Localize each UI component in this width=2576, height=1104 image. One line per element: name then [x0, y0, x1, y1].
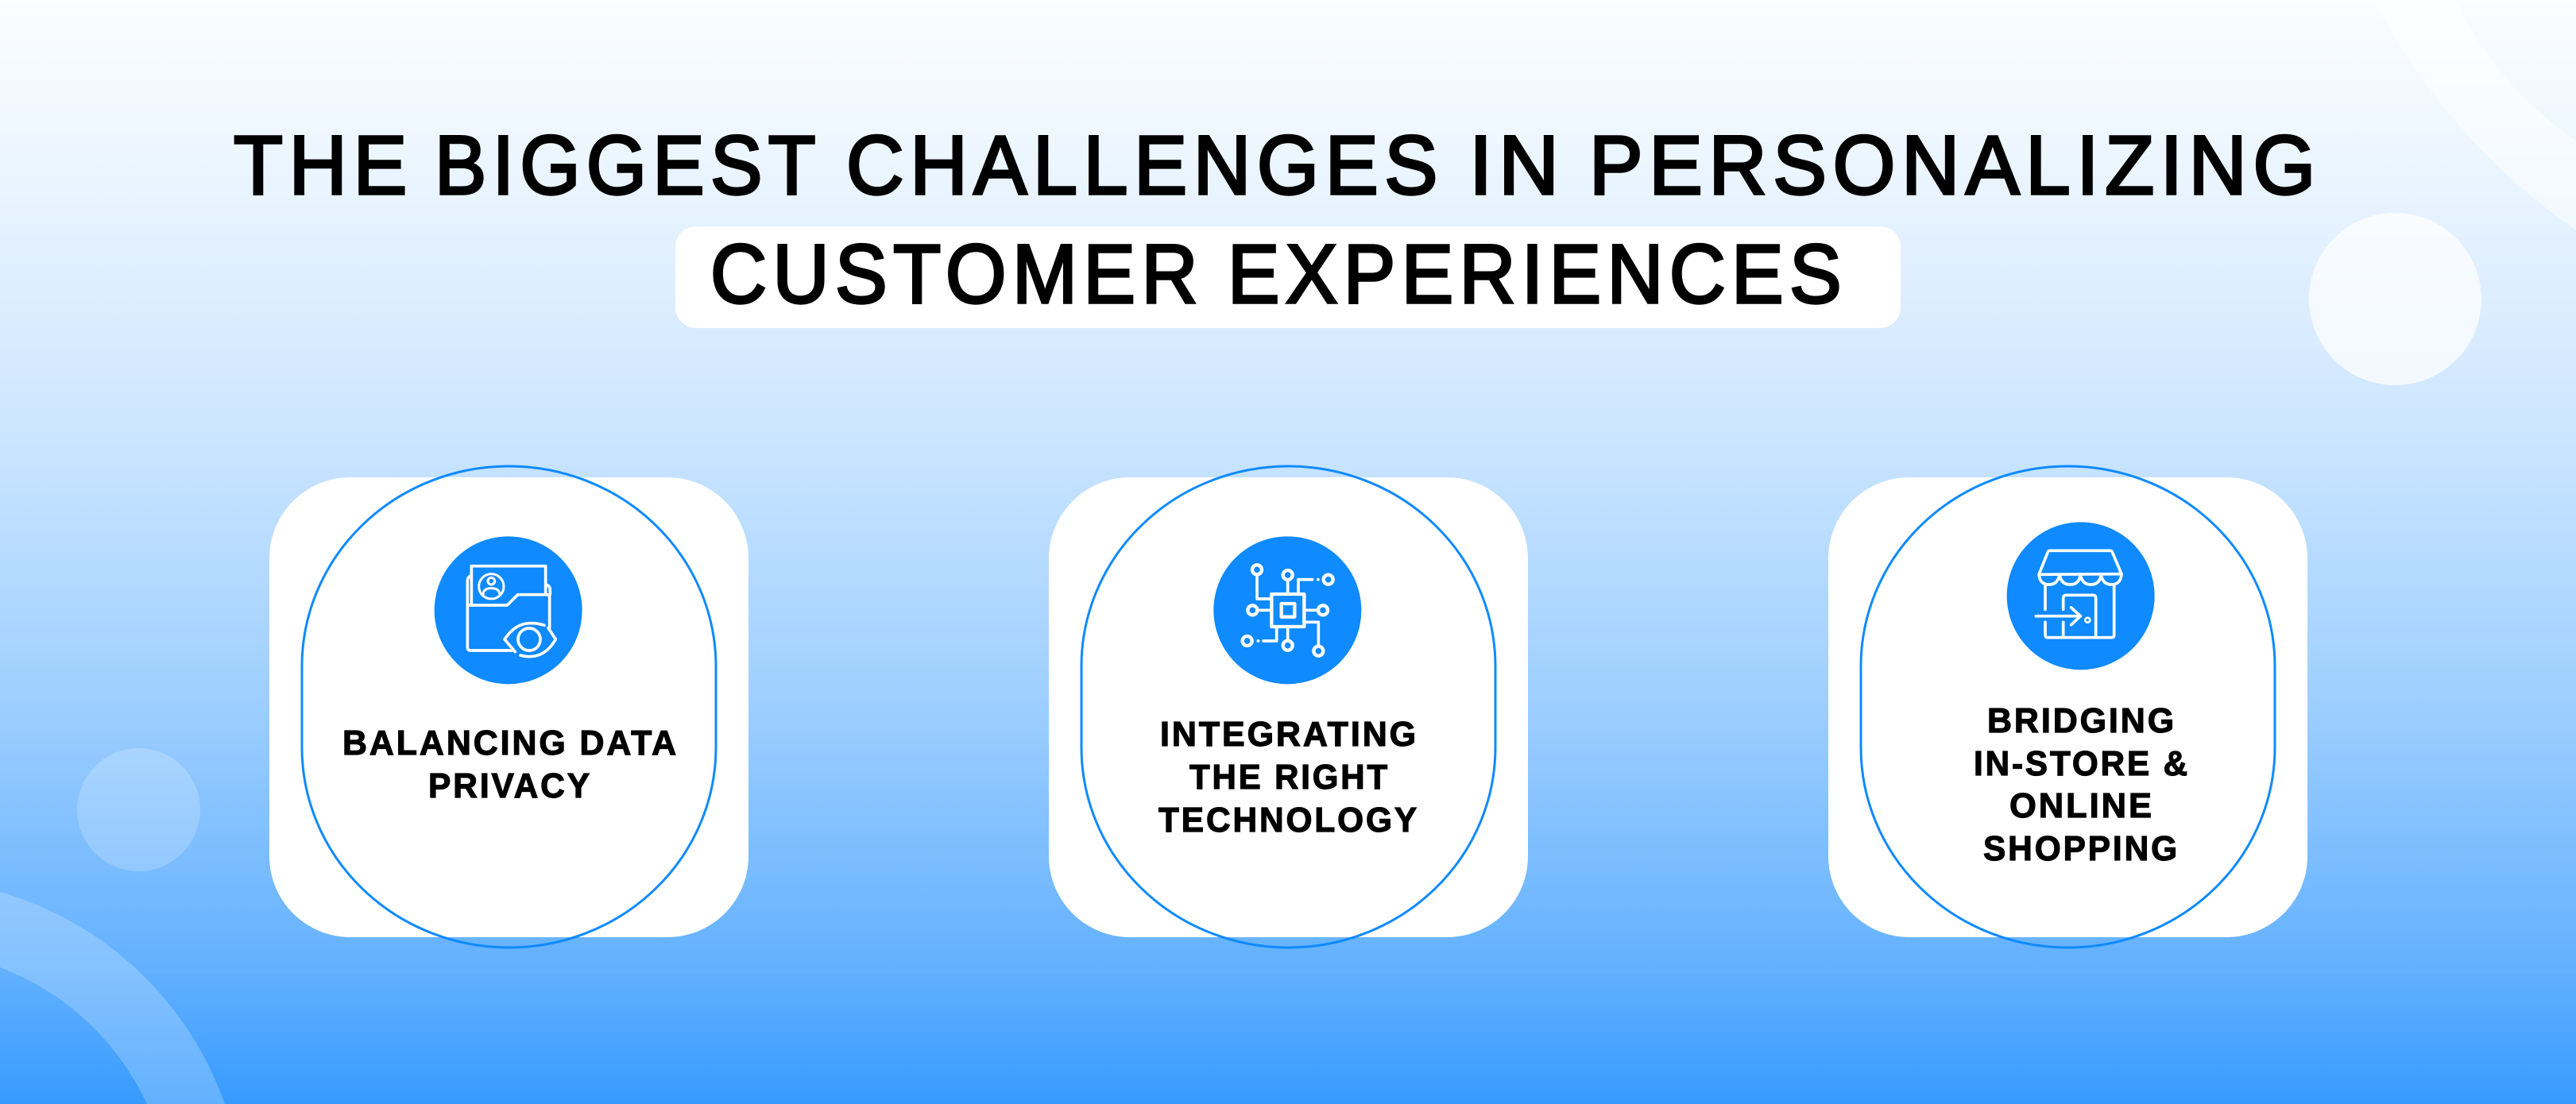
title line 1: THE	[234, 119, 413, 212]
card background	[1049, 477, 1528, 937]
decoration: bottom left arc	[0, 892, 225, 1104]
label: THE RIGHT	[1189, 758, 1390, 797]
label: ONLINE	[2009, 786, 2154, 825]
card outline	[1861, 466, 2275, 948]
title line 1	[234, 119, 2322, 212]
label	[1158, 715, 1419, 840]
panel: integrating the right technology	[1049, 466, 1528, 948]
panel: bridging in-store and online shopping	[1828, 466, 2307, 948]
card background	[269, 477, 748, 937]
decoration: top right arc	[2374, 0, 2576, 230]
label: SHOPPING	[1983, 829, 2180, 868]
label: TECHNOLOGY	[1158, 801, 1419, 840]
card outline	[1081, 466, 1495, 948]
card outline	[302, 466, 716, 948]
title highlight pill	[675, 226, 1901, 328]
label: IN-STORE &	[1974, 744, 2190, 783]
label: BRIDGING	[1987, 701, 2176, 740]
card background	[1828, 477, 2307, 937]
label: BALANCING DATA	[342, 724, 679, 762]
title line 1: IN	[1469, 119, 1565, 212]
title line 2	[710, 228, 1847, 321]
title	[234, 119, 2322, 328]
title line 2: EXPERIENCES	[1228, 228, 1847, 321]
title line 1: CHALLENGES	[846, 119, 1444, 212]
label	[1974, 701, 2190, 868]
label: PRIVACY	[428, 766, 592, 805]
decoration: left circle	[77, 748, 200, 871]
label	[342, 724, 679, 805]
label: INTEGRATING	[1160, 715, 1418, 754]
decoration: top right circle	[2309, 213, 2481, 385]
icon: storefront with arrow	[2007, 522, 2155, 670]
title line 2: CUSTOMER	[710, 228, 1204, 321]
title line 1: PERSONALIZING	[1589, 119, 2322, 212]
icon: circuit chip	[1213, 536, 1361, 684]
title line 1: BIGGEST	[435, 119, 822, 212]
panel: balancing data privacy	[269, 466, 748, 948]
icon: folder with eye	[435, 536, 582, 684]
